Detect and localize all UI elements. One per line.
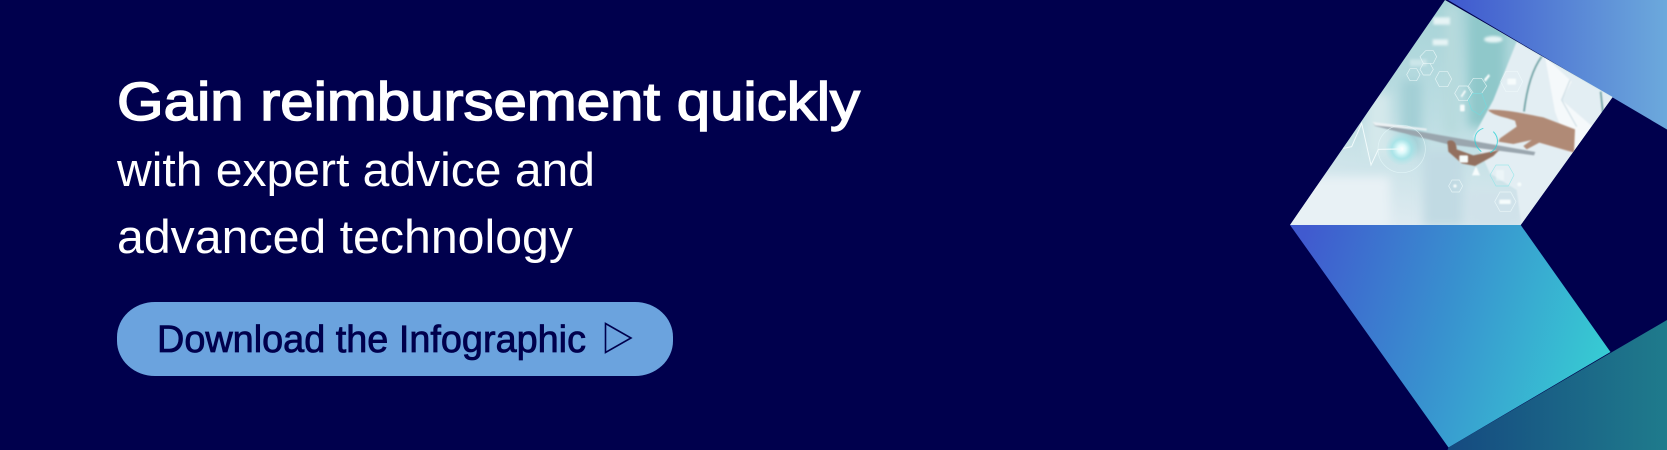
top-right gradient shape bbox=[1448, 0, 1667, 130]
photo: heartbeat line bbox=[1343, 123, 1402, 165]
button label: Download the Infographic bbox=[157, 319, 586, 361]
photo: radar glow bbox=[1378, 125, 1425, 173]
photo: hexagon icons bbox=[1407, 51, 1523, 211]
bottom-right gradient shape bbox=[1448, 320, 1667, 450]
photo: blurred corridor background bbox=[1290, 0, 1523, 230]
photo: tablet bbox=[1373, 122, 1535, 155]
subtitle line 1: with expert advice and bbox=[116, 143, 595, 196]
photo: white coat bbox=[1473, 42, 1618, 227]
icon: play arrow bbox=[606, 324, 631, 352]
middle gradient shape bbox=[1290, 225, 1610, 448]
photo: small white icon glyphs bbox=[1453, 74, 1521, 204]
photo: hands bbox=[1447, 110, 1575, 166]
photo: ceiling lights bbox=[1410, 17, 1503, 66]
title: Gain reimbursement quickly bbox=[117, 72, 860, 132]
photo: doctor using tablet bbox=[1287, 0, 1620, 230]
download button bbox=[117, 302, 673, 376]
subtitle line 2: advanced technology bbox=[117, 210, 574, 263]
